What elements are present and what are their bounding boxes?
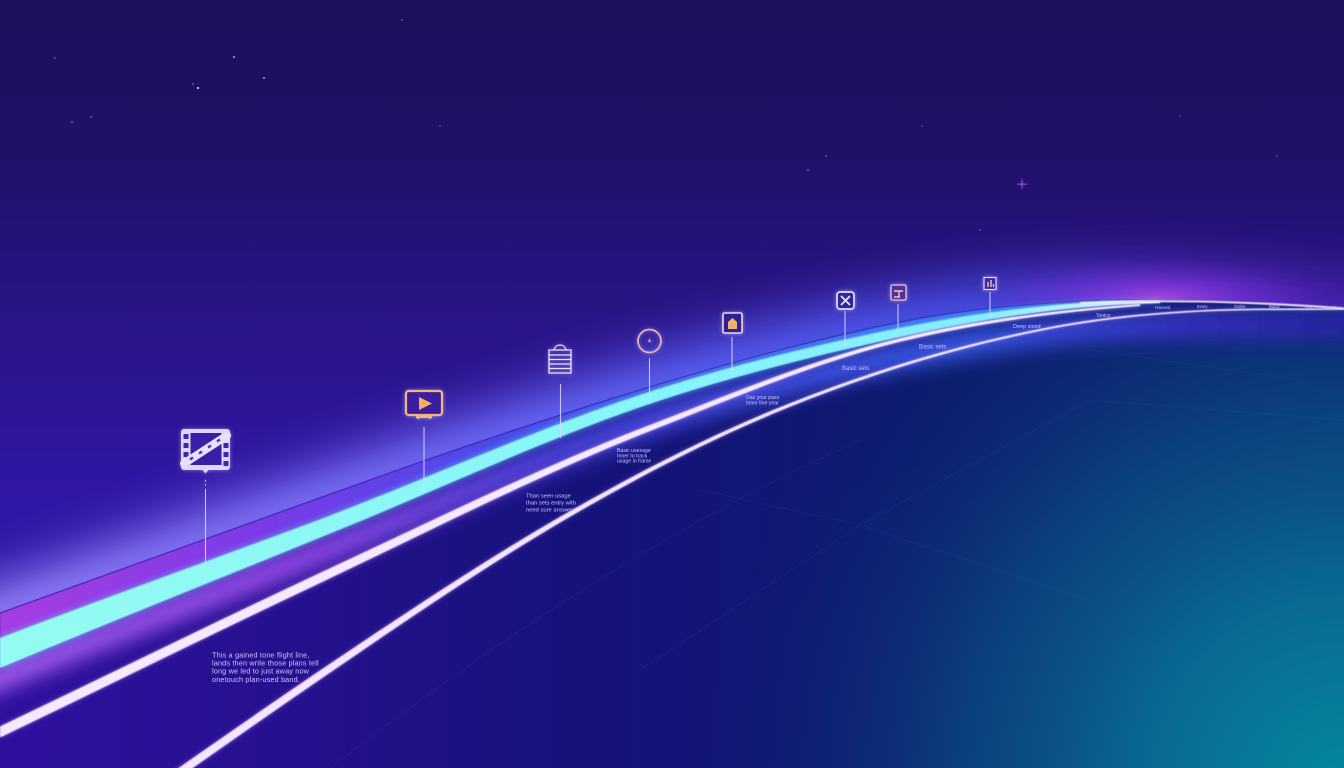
caption 4: Inner line year xyxy=(746,400,779,406)
caption 8: Tonics xyxy=(1096,313,1111,319)
small line labels: Sit xyxy=(1331,305,1337,310)
caption 2: than sets entry with xyxy=(526,500,576,506)
second white line xyxy=(170,308,1344,768)
caption 4: Das your pass xyxy=(746,395,780,401)
small line labels xyxy=(1155,304,1337,310)
caption 1: lands then write those plans tell xyxy=(212,658,319,668)
icon 3: clipboard list xyxy=(549,345,571,373)
small line labels: Harvest xyxy=(1155,305,1171,310)
glow above the timeline band xyxy=(0,258,1344,656)
caption 5: Basic sets xyxy=(842,366,869,372)
icon 7: chart tile xyxy=(891,285,906,300)
small line labels: Order xyxy=(1234,304,1246,309)
caption 1: onetouch plan-used band. xyxy=(212,675,300,684)
caption 1: This a gained tone flight line, xyxy=(212,650,310,660)
small line labels: Basic xyxy=(1269,304,1281,309)
caption 2: need sure answers xyxy=(526,508,575,514)
caption 2: Than seen usage xyxy=(526,494,571,500)
caption 3: usage in frame xyxy=(617,458,651,464)
icon 4: clock dial xyxy=(638,330,661,352)
first white line xyxy=(0,304,1140,738)
icon 5: home tile xyxy=(723,313,742,333)
caption 3: Inner to track xyxy=(617,454,648,460)
stars xyxy=(54,19,1277,231)
caption 3 xyxy=(617,448,651,464)
purple strip between edge and cyan band xyxy=(0,300,1160,668)
caption 4 xyxy=(746,395,780,406)
glow under the cyan band xyxy=(0,325,1344,725)
icon 8: bar tile xyxy=(984,278,996,290)
faint surface grid lines xyxy=(330,340,1344,768)
ground: lower planet surface xyxy=(0,300,1344,768)
glowing cyan timeline band xyxy=(0,301,1344,668)
band upper edge line xyxy=(0,300,1100,613)
icon 2: video screen xyxy=(406,391,442,419)
caption 6: Basic sets xyxy=(919,344,946,350)
caption 3: Basic usesage xyxy=(617,448,651,454)
small line labels: Cut xyxy=(1305,304,1313,309)
icon 6: crossed tools xyxy=(837,292,854,309)
icon 1: film strip xyxy=(181,429,230,486)
caption 2 xyxy=(526,494,576,514)
caption 1 xyxy=(212,650,319,684)
caption 1: long we led to just away now xyxy=(212,666,310,676)
small line labels: Entry xyxy=(1197,304,1208,309)
connector stems xyxy=(206,292,990,582)
caption 7: Deep sized xyxy=(1013,324,1041,330)
